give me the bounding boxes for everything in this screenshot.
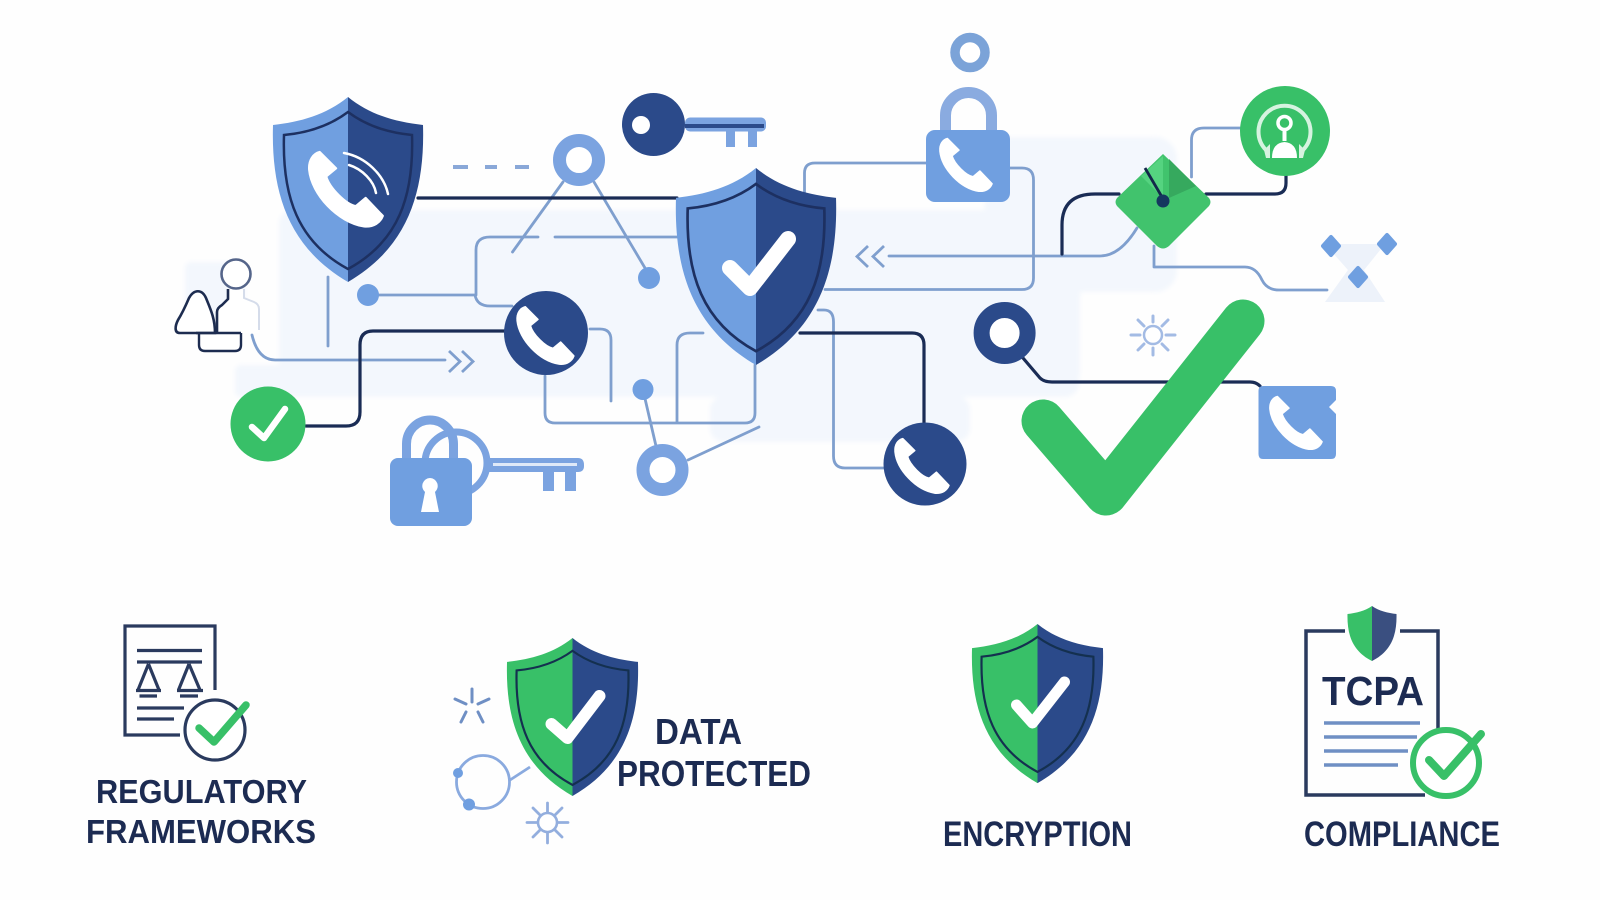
- label: regulatory frameworks: [86, 773, 316, 850]
- icon: green diamond dial: [1116, 154, 1210, 248]
- icon: sun small: [527, 803, 568, 843]
- icon: tcpa document: [1306, 606, 1481, 796]
- icon: regulatory document: [125, 626, 246, 760]
- label: data protected: DATA: [655, 711, 742, 752]
- node dots: [357, 267, 660, 400]
- icon: phone circle centre: [504, 291, 588, 375]
- label: encryption: ENCRYPTION: [943, 815, 1132, 854]
- label: tcpa: TCPA: [1322, 668, 1424, 714]
- connector lines: navy: [306, 175, 1286, 426]
- icon: green navy shield: [507, 638, 638, 796]
- icon: orbit ring: [453, 756, 530, 810]
- icon: lock and key: [390, 420, 584, 526]
- dashes: [453, 165, 529, 169]
- chevrons right: [449, 351, 473, 372]
- label: data protected: PROTECTED: [617, 753, 811, 794]
- label: regulatory frameworks: FRAMEWORKS: [86, 813, 316, 850]
- icon: people: [176, 260, 259, 351]
- panel: regulatory frameworks: [86, 626, 316, 850]
- icon: phone shield: [273, 97, 423, 282]
- panel: data protected: [453, 638, 811, 843]
- icon: ring node bottom: [643, 450, 682, 490]
- icon: sparkle: [455, 689, 489, 722]
- connector lines: blue: [252, 128, 1327, 468]
- icon: phone lock: [926, 92, 1010, 202]
- icon: green support badge: [1240, 86, 1330, 176]
- label: data protected: [617, 711, 811, 794]
- icon: hourglass nodes: [1323, 235, 1395, 302]
- network diagram: [176, 38, 1395, 526]
- icon: ring node top: [560, 140, 598, 180]
- icon: mini shield: [1347, 606, 1397, 661]
- chevrons left: [857, 246, 884, 267]
- icon: top ring: [955, 38, 985, 68]
- icon: encryption shield: [972, 624, 1103, 783]
- icon: big green check: [1043, 321, 1243, 494]
- panel: encryption: [943, 624, 1132, 854]
- icon: top key: [622, 93, 766, 156]
- label: regulatory frameworks: REGULATORY: [96, 773, 307, 810]
- icon: main check shield: [676, 168, 836, 365]
- icon: sun: [1131, 316, 1175, 355]
- icon: navy ring: [982, 310, 1028, 356]
- icon: phone tile: [1258, 386, 1336, 459]
- panel: tcpa compliance: [1304, 606, 1500, 854]
- icon: green check badge: [230, 386, 306, 462]
- label: compliance: COMPLIANCE: [1304, 815, 1500, 854]
- icon: phone circle lower: [884, 422, 966, 506]
